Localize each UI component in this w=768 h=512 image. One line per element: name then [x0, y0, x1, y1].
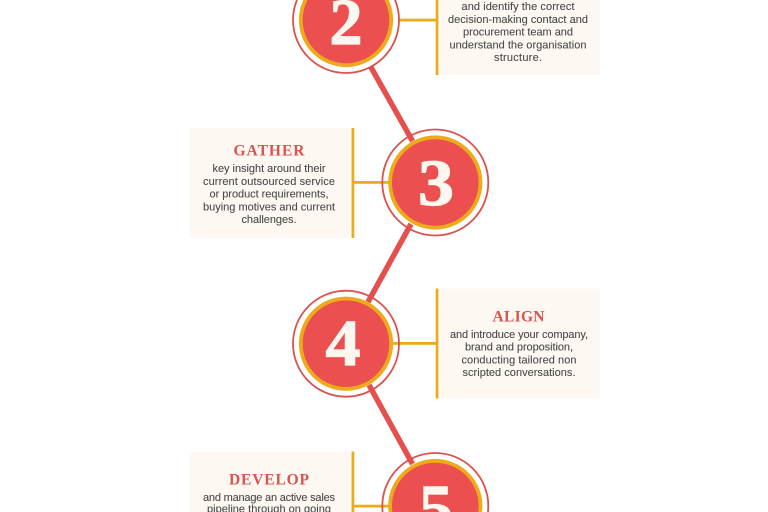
- text: step 2 description: structure.: [494, 52, 542, 64]
- heading: develop: DEVELOP: [229, 472, 310, 488]
- text: align description: brand and proposition,: [465, 342, 573, 354]
- badge: step 3: 3: [418, 147, 454, 220]
- panel: gather: [190, 128, 392, 238]
- panel: step 2: [393, 0, 600, 75]
- text: gather description: current outsourced service: [203, 176, 335, 188]
- text: gather description: key insight around their: [212, 163, 326, 175]
- text: step 2 description: and identify the correct: [462, 1, 574, 13]
- connector: step 4 to 5: [369, 385, 412, 464]
- text: align description: and introduce your company,: [450, 329, 588, 341]
- heading: align: ALIGN: [492, 308, 544, 326]
- text: align description: scripted conversations.: [462, 367, 576, 379]
- text: gather description: [203, 163, 335, 226]
- text: gather description: or product requirements,: [210, 188, 328, 200]
- text: develop description: [203, 492, 336, 512]
- badge: step 4: 4: [326, 307, 360, 380]
- panel: align: [393, 288, 600, 398]
- text: step 2 description: decision-making contact and: [448, 14, 588, 26]
- text: align description: [450, 329, 588, 379]
- text: step 2 description: understand the organisation: [450, 40, 586, 52]
- text: gather description: buying motives and current: [203, 202, 335, 214]
- connector: step 3 to 4: [368, 224, 411, 302]
- text: gather description: challenges.: [242, 214, 296, 226]
- badge: step 5: [382, 453, 488, 512]
- badge: step 2: [293, 0, 399, 73]
- connector: step 2 to 3: [368, 62, 412, 141]
- text: step 2 description: [448, 1, 588, 64]
- text: step 2 description: procurement team and: [463, 26, 573, 38]
- text: develop description: and manage an active sales: [203, 492, 336, 504]
- text: align description: conducting tailored non: [462, 354, 576, 366]
- badge: step 4: [293, 291, 399, 397]
- heading: gather: GATHER: [234, 142, 305, 160]
- panel: develop: [190, 452, 392, 512]
- badge: step 3: [382, 130, 488, 236]
